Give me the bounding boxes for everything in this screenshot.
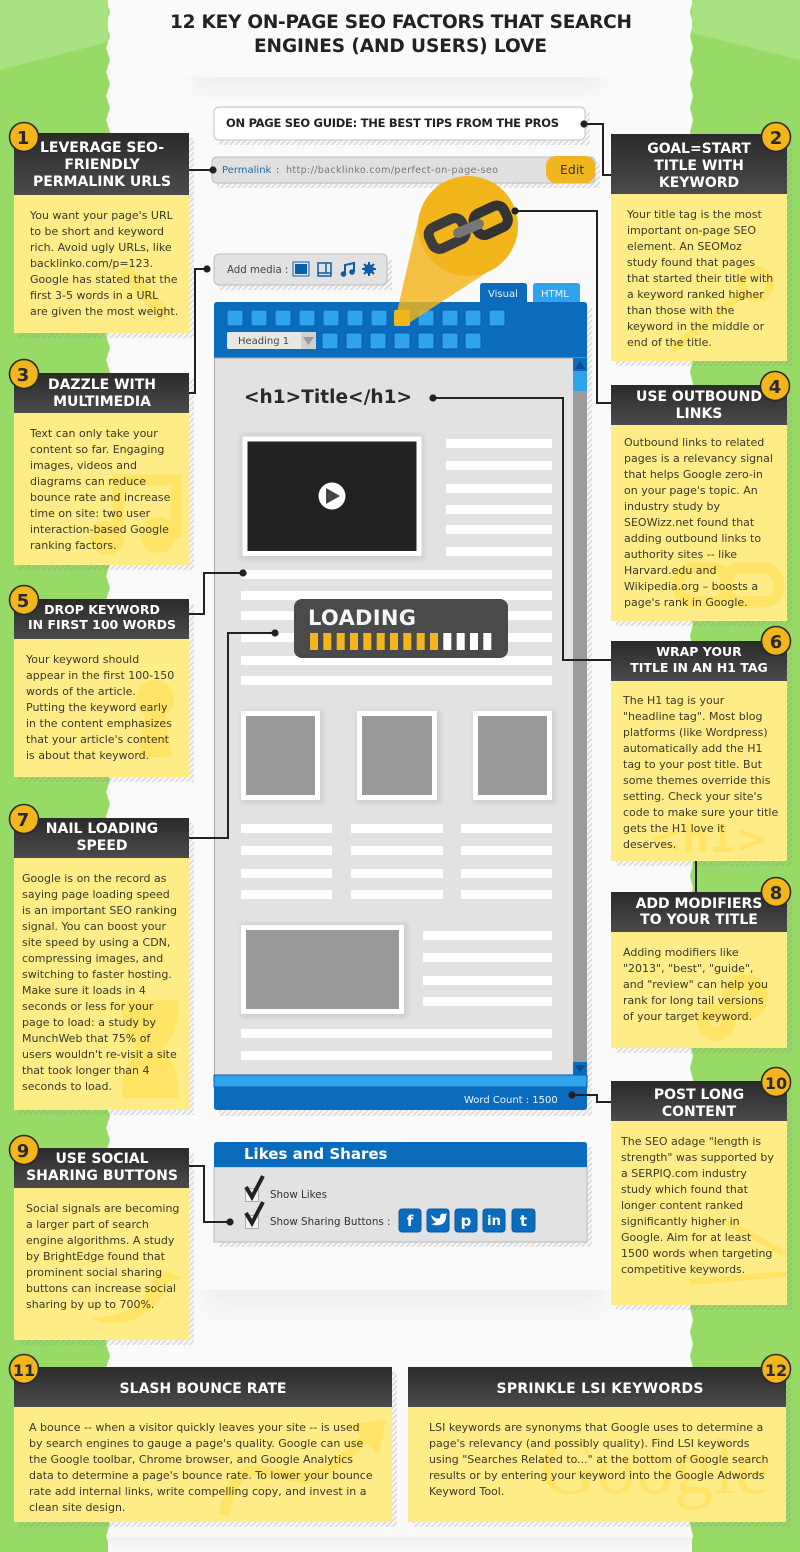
body text: rank for long tail versions: [623, 994, 764, 1007]
editor hatch shadow: [219, 307, 592, 1116]
video placeholder: [240, 434, 424, 560]
card 6: H1 tag: [611, 626, 792, 866]
left green side band: [0, 0, 112, 1552]
body text: a keyword ranked higher: [627, 288, 764, 301]
body text: LSI keywords are synonyms that Google uses to determine a: [429, 1421, 763, 1434]
body text: deserves.: [623, 838, 676, 851]
heading: WRAP YOUR: [656, 644, 742, 659]
body text: keyword in the middle or: [627, 320, 765, 333]
heading: USE OUTBOUND: [636, 389, 762, 405]
body text: diagrams can reduce: [30, 475, 146, 488]
body text: that your article's content: [26, 733, 170, 746]
body text: site speed by using a CDN,: [22, 936, 170, 949]
badge: 12: [765, 1361, 787, 1380]
body text: 1500 words when targeting: [621, 1247, 772, 1260]
body text: end of the title.: [627, 336, 712, 349]
bottom shadow band: [108, 1537, 692, 1552]
text lines beside image: [423, 931, 552, 1006]
heading: TITLE IN AN H1 TAG: [630, 660, 768, 675]
social buttons: p: [461, 1212, 472, 1230]
heading: GOAL=START: [647, 141, 751, 157]
body text: by BrightEdge found that: [26, 1250, 166, 1263]
body text: Google is on the record as: [22, 872, 167, 885]
permalink bar: :: [276, 165, 279, 176]
body text: are given the most weight.: [30, 305, 178, 318]
likes and shares panel: Likes and Shares: [244, 1145, 388, 1163]
card 2: title keyword: [611, 122, 792, 366]
heading: FRIENDLY: [64, 157, 141, 173]
watermark: keyhole: [136, 680, 174, 757]
body text: Make sure it loads in 4: [22, 984, 146, 997]
heading: NAIL LOADING: [46, 821, 158, 837]
main title: [170, 12, 632, 57]
badge: 10: [765, 1074, 787, 1093]
badge: [760, 372, 790, 400]
watermark: chain: [678, 568, 779, 602]
body text: Text can only take your: [29, 427, 158, 440]
connector: 5 to first lines: [189, 569, 247, 614]
body text: Google. Aim for at least: [621, 1231, 752, 1244]
tab: Visual: Visual: [488, 289, 518, 300]
body text: The SEO adage "length is: [620, 1135, 761, 1148]
heading: DAZZLE WITH: [48, 377, 156, 393]
badge: [762, 1068, 790, 1096]
heading: SPRINKLE LSI KEYWORDS: [496, 1381, 704, 1397]
body text: study found that pages: [627, 256, 755, 269]
text lines beside video: [446, 439, 552, 556]
body text: MunchWeb that 75% of: [22, 1032, 151, 1045]
body text: A bounce -- when a visitor quickly leaves your site -- is used: [29, 1421, 360, 1434]
watermark: key: [672, 270, 770, 350]
card 12: LSI keywords: [408, 1354, 791, 1527]
body text: significantly higher in: [621, 1215, 740, 1228]
body text: bounce rate and increase: [30, 491, 171, 504]
badge: [10, 804, 38, 834]
body text: The H1 tag is your: [622, 694, 725, 707]
badge: [762, 626, 790, 656]
body text: words of the article.: [26, 685, 136, 698]
body text: in the content emphasizes: [26, 717, 172, 730]
body text: competitive keywords.: [621, 1263, 745, 1276]
body text: switching to faster hosting.: [22, 968, 172, 981]
watermark: twitter bird: [90, 1271, 182, 1323]
badge: [762, 1354, 790, 1384]
body text: users wouldn't re-visit a site: [22, 1048, 177, 1061]
badge: 6: [770, 632, 782, 653]
body text: interaction-based Google: [30, 523, 169, 536]
heading sample: <h1>Title</h1>: [244, 387, 412, 408]
editor content area: [214, 358, 586, 1075]
editor toolbar: Heading 1: [238, 336, 289, 347]
add media box: Add media :: [227, 265, 288, 276]
loading bar: LOADING: [308, 606, 416, 630]
body text: sharing by up to 700%.: [26, 1298, 154, 1311]
body text: time on site: two user: [30, 507, 151, 520]
body text: platforms (like Wordpress): [623, 726, 768, 739]
badge: 1: [17, 128, 29, 149]
heading: DROP KEYWORD: [44, 602, 160, 617]
body text: setting. Check your site's: [623, 790, 763, 803]
badge: [762, 878, 790, 906]
heading: KEYWORD: [659, 175, 739, 191]
body text: that helps Google zero-in: [624, 468, 763, 481]
card 1: permalink: [10, 122, 194, 338]
body text: page's relevancy (and possibly quality). Find LSI keywords: [429, 1437, 750, 1450]
body text: "2013", "best", "guide",: [623, 962, 753, 975]
connector: 8 to card 6: [695, 861, 697, 892]
badge: [762, 122, 790, 152]
tab: HTML: [533, 283, 580, 302]
connector: 2 to page title: [580, 120, 611, 175]
body text: industry study by: [624, 500, 721, 513]
body text: data to determine a page's bounce rate. To lower your bounce: [29, 1469, 373, 1482]
body text: gets the H1 love it: [623, 822, 725, 835]
body text: element. An SEOMoz: [627, 240, 742, 253]
connector: 6 to h1: [429, 394, 611, 660]
connector: 4 to link icon: [511, 207, 611, 403]
body text: Keyword Tool.: [429, 1485, 504, 1498]
card 9: social buttons: [10, 1136, 194, 1345]
checkbox: show sharing buttons: [246, 1202, 390, 1228]
main title: 12 KEY ON-PAGE SEO FACTORS THAT SEARCH: [170, 12, 632, 33]
body text: that started their title with: [627, 272, 773, 285]
body text: a SERPIQ.com industry: [621, 1167, 747, 1180]
badge: [10, 122, 38, 152]
body text: a larger part of search: [26, 1218, 149, 1231]
heading: SHARING BUTTONS: [26, 1168, 178, 1184]
body text: Social signals are becoming: [26, 1202, 179, 1215]
tab: Visual: [480, 283, 527, 302]
body text: compressing images, and: [22, 952, 163, 965]
watermark: music note: [118, 480, 176, 540]
add media box: [214, 254, 392, 290]
card 4: outbound links: [611, 372, 792, 626]
body text: first 3-5 words in a URL: [30, 289, 159, 302]
body text: some themes override this: [623, 774, 771, 787]
body text: authority sites -- like: [624, 548, 737, 561]
heading: SPEED: [76, 838, 128, 854]
heading: TO YOUR TITLE: [640, 912, 758, 928]
badge: 2: [770, 128, 782, 149]
body text: backlinko.com/p=123.: [30, 257, 153, 270]
body text: pages is a relevancy signal: [624, 452, 773, 465]
body text: by search engines to gauge a page's quality. Google can use: [29, 1437, 364, 1450]
badge: [10, 1354, 38, 1384]
watermark: link: [124, 268, 166, 318]
body text: page to load: a study by: [22, 1016, 156, 1029]
badge: 5: [17, 591, 29, 612]
body text: Harvard.edu and: [624, 564, 717, 577]
checkbox: show likes: Show Likes: [270, 1189, 327, 1201]
editor status bar: [214, 1075, 587, 1110]
connector: 10 to word count: [568, 1091, 611, 1102]
badge: [10, 360, 38, 388]
card 10: long content: [611, 1068, 792, 1310]
lower shadow band: [205, 1290, 605, 1325]
body text: Wikipedia.org – boosts a: [624, 580, 758, 593]
likes and shares panel: [214, 1142, 592, 1247]
connector: 3 to add media: [189, 265, 211, 393]
badge: 9: [17, 1141, 29, 1162]
body text: clean site design.: [29, 1501, 125, 1514]
badge: 4: [769, 377, 781, 398]
heading: TITLE WITH: [654, 158, 744, 174]
watermark: gears: [704, 982, 760, 1034]
body text: of your target keyword.: [623, 1010, 752, 1023]
body text: seconds or less for your: [22, 1000, 154, 1013]
connector: 1 to permalink: [189, 166, 217, 174]
loading bar: [294, 599, 508, 658]
permalink bar: Permalink: [222, 165, 272, 176]
tab: HTML: HTML: [541, 289, 569, 300]
three column text lines: [241, 824, 552, 899]
body text: code to make sure your title: [623, 806, 778, 819]
body text: using "Searches Related to..." at the bottom of Google search: [429, 1453, 769, 1466]
body text: tag to your post title. But: [623, 758, 763, 771]
watermark: Google: Google: [540, 1423, 770, 1510]
connector: 7 to loading: [189, 629, 279, 838]
body text: Outbound links to related: [624, 436, 764, 449]
body text: seconds to load.: [22, 1080, 112, 1093]
badge: 8: [770, 883, 782, 904]
badge: 3: [17, 365, 29, 386]
connector: 9 to sharing buttons: [189, 1166, 234, 1226]
card 11: bounce rate: [10, 1354, 397, 1527]
body text: is about that keyword.: [26, 749, 149, 762]
body text: strength" was supported by: [621, 1151, 774, 1164]
permalink bar: Edit: [560, 162, 584, 177]
body text: rate add internal links, write compelling copy, and invest in a: [29, 1485, 367, 1498]
watermark: pencil: [690, 1222, 786, 1282]
body text: adding outbound links to: [624, 532, 761, 545]
body text: appear in the first 100-150: [26, 669, 174, 682]
page title field: [214, 107, 590, 145]
permalink bar: [212, 156, 600, 188]
heading: PERMALINK URLS: [33, 174, 171, 190]
social buttons: f: [407, 1212, 414, 1230]
editor toolbar: [214, 302, 587, 358]
body text: signal. You can boost your: [22, 920, 166, 933]
body text: than those with the: [627, 304, 735, 317]
heading: IN FIRST 100 WORDS: [28, 617, 176, 632]
body text: Your title tag is the most: [626, 208, 763, 221]
body text: automatically add the H1: [623, 742, 763, 755]
body text: study which found that: [621, 1183, 749, 1196]
body text: the Google toolbar, Chrome browser, and Google Analytics: [29, 1453, 353, 1466]
body text: prominent social sharing: [26, 1266, 162, 1279]
full width text lines: [241, 570, 552, 685]
watermark: hourglass: [122, 1000, 178, 1098]
body text: is an important SEO ranking: [22, 904, 177, 917]
body text: on your page's topic. An: [624, 484, 758, 497]
body text: buttons can increase social: [26, 1282, 176, 1295]
heading: LINKS: [676, 406, 722, 422]
permalink bar: http://backlinko.com/perfect-on-page-seo: [286, 165, 498, 176]
social buttons: [399, 1209, 535, 1232]
heading: POST LONG: [654, 1087, 744, 1103]
link callout: [394, 176, 518, 325]
body text: engine algorithms. A study: [26, 1234, 175, 1247]
social buttons: t: [520, 1212, 527, 1230]
body text: page's rank in Google.: [624, 596, 748, 609]
body text: Your keyword should: [25, 653, 139, 666]
bottom text lines: [241, 1029, 552, 1060]
body text: important on-page SEO: [627, 224, 756, 237]
editor window: [214, 283, 592, 1116]
social buttons: in: [487, 1214, 501, 1229]
card 8: modifiers: [611, 878, 792, 1053]
image placeholders row: [241, 711, 556, 804]
body text: ranking factors.: [30, 539, 117, 552]
body text: that took longer than 4: [22, 1064, 150, 1077]
body text: rich. Avoid ugly URLs, like: [30, 241, 172, 254]
body text: content so far. Engaging: [30, 443, 164, 456]
badge: [10, 586, 38, 614]
watermark: h1 tag: <h1>: [650, 817, 767, 861]
badge: 11: [13, 1361, 35, 1380]
scrollbar: [573, 358, 587, 1075]
right green side band: [686, 0, 800, 1552]
body text: longer content ranked: [621, 1199, 743, 1212]
badge: 7: [17, 810, 29, 831]
body text: saying page loading speed: [22, 888, 170, 901]
body text: images, videos and: [30, 459, 137, 472]
body text: SEOWizz.net found that: [624, 516, 755, 529]
body text: Adding modifiers like: [623, 946, 739, 959]
body text: to be short and keyword: [30, 225, 164, 238]
top shadow band: [195, 77, 600, 105]
body text: "headline tag". Most blog: [623, 710, 762, 723]
checkbox: show sharing buttons: Show Sharing Buttons :: [270, 1216, 390, 1228]
body text: results or by entering your keyword into the Google Adwords: [429, 1469, 765, 1482]
heading: LEVERAGE SEO-: [40, 140, 164, 156]
watermark: arrow: [224, 1420, 386, 1515]
heading: ADD MODIFIERS: [636, 896, 762, 912]
card 5: keyword first 100 words: [10, 586, 194, 782]
heading: MULTIMEDIA: [53, 394, 151, 410]
editor status bar: Word Count : 1500: [464, 1095, 558, 1106]
card 3: multimedia: [10, 360, 194, 570]
heading: SLASH BOUNCE RATE: [120, 1381, 286, 1397]
body text: Google has stated that the: [30, 273, 178, 286]
heading: USE SOCIAL: [55, 1151, 149, 1167]
body text: and "review" can help you: [623, 978, 768, 991]
page title field: ON PAGE SEO GUIDE: THE BEST TIPS FROM THE PROS: [226, 116, 559, 130]
card 7: loading speed: [10, 804, 194, 1115]
badge: [10, 1136, 38, 1164]
body text: Putting the keyword early: [26, 701, 168, 714]
heading: CONTENT: [662, 1104, 737, 1120]
large image placeholder: [241, 923, 408, 1018]
main title: ENGINES (AND USERS) LOVE: [254, 36, 547, 57]
body text: You want your page's URL: [29, 209, 174, 222]
checkbox: show likes: [246, 1176, 327, 1202]
